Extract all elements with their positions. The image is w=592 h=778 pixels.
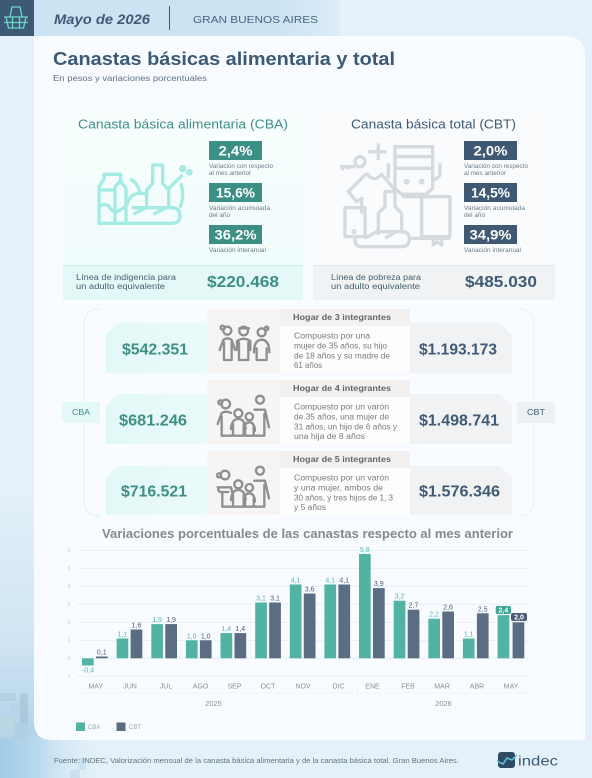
logo: indec (497, 752, 558, 768)
highlighted May 2026 labels (496, 606, 527, 622)
tag: CBT: CBT (527, 408, 545, 417)
highlighted May 2026 labels: 2,4 (499, 608, 508, 614)
poverty line: $485.030 (465, 274, 537, 291)
y axis labels: 1 (68, 638, 71, 644)
stat: cumulative CBA (209, 183, 271, 219)
icon: family of 4 (218, 396, 269, 436)
stat: annual CBT (464, 225, 521, 254)
stat: monthly CBA (209, 141, 274, 177)
panel: CBT (313, 106, 555, 300)
CBT bars (96, 584, 524, 658)
household section (62, 309, 555, 516)
CBA bars (82, 554, 509, 666)
stat: monthly CBA: Variación con respecto (209, 164, 274, 170)
value CBT 4: $1.498.741 (419, 412, 499, 430)
CBA value labels: 1,1 (118, 632, 127, 638)
stat: cumulative CBA: del año (209, 213, 231, 219)
stat: cumulative CBA: 15,6% (216, 184, 256, 200)
description household 5: y 5 años (294, 503, 326, 512)
stat: cumulative CBT: 14,5% (471, 184, 511, 200)
description household 3: de 18 años y su madre de (294, 352, 391, 360)
CBT value labels: 3,1 (270, 596, 280, 602)
description household 4: 31 años, un hijo de 6 años y (294, 422, 397, 432)
value CBT 5: $1.576.346 (419, 484, 500, 500)
description household 3 (294, 332, 391, 370)
heading CBT: Canasta básica total (CBT) (351, 116, 516, 132)
description household 3: mujer de 35 años, su hijo (294, 342, 388, 350)
month labels: SEP (227, 684, 242, 690)
heading household 3: Hogar de 3 integrantes (293, 313, 392, 322)
CBA value labels: 1,9 (152, 617, 162, 624)
description household 4: de 35 años, una mujer de (294, 412, 390, 422)
description household 3: Compuesto por una (294, 332, 371, 340)
year labels: 2025 (205, 699, 222, 708)
icon: goods (340, 143, 450, 247)
legend: CBT (129, 725, 141, 731)
y axis labels: 1 (68, 674, 71, 680)
logo: indec: indec (518, 752, 558, 768)
month labels: AGO (193, 684, 209, 690)
month labels: FEB (401, 684, 415, 690)
CBA value labels: -0,4 (82, 668, 94, 674)
CBA value labels: 5,8 (360, 547, 370, 554)
y axis labels: 6 (68, 548, 71, 554)
stat: annual CBT: 34,9% (470, 226, 512, 242)
indigence line: un adulto equivalente (76, 282, 166, 291)
stat: monthly CBT (464, 141, 529, 177)
CBT value labels (97, 578, 488, 656)
description household 5 (294, 474, 394, 512)
header band (0, 0, 340, 36)
CBA value labels: 4,1 (291, 578, 301, 584)
stat: annual CBA: Variación interanual (209, 248, 266, 254)
description household 5: y una mujer, ambos de (294, 484, 384, 492)
CBA value labels: 1,4 (221, 626, 231, 633)
CBA value labels: 2,2 (429, 612, 439, 619)
description household 4: Compuesto por un varón (294, 402, 389, 412)
value CBA 4: $681.246 (119, 412, 187, 430)
tag: CBA (62, 402, 100, 423)
CBA value labels: 1,0 (187, 633, 197, 640)
y axis labels: 5 (68, 566, 71, 572)
stat: annual CBA (209, 225, 266, 254)
icon: food (99, 165, 191, 223)
stat: monthly CBT: 2,0% (474, 142, 508, 158)
y axis labels (68, 548, 71, 680)
poverty line (331, 273, 537, 291)
source note: Fuente: INDEC, Valorización mensual de la canasta básica alimentaria y de la canasta básica total. Gran Buenos Aires. (54, 758, 459, 765)
subtitle: En pesos y variaciones porcentuales (53, 74, 207, 83)
stat: cumulative CBA: Variación acumulada (209, 206, 271, 212)
CBT value labels: 3,9 (374, 581, 384, 588)
month labels: JUN (123, 684, 137, 690)
month labels: MAY (88, 684, 103, 690)
panel: CBA (63, 106, 303, 300)
CBA value labels: 3,1 (256, 596, 266, 602)
CBT value labels: 3,6 (305, 586, 315, 594)
description household 4 (294, 402, 397, 441)
legend (76, 722, 141, 731)
y axis labels: 0 (68, 656, 71, 662)
description household 3: 61 años (294, 361, 322, 370)
stat: monthly CBA: 2,4% (218, 142, 253, 158)
tag: CBA: CBA (72, 408, 91, 417)
month labels: DIC (332, 684, 345, 690)
month labels: OCT (261, 684, 276, 690)
poverty line: un adulto equivalente (331, 282, 421, 291)
household of 4 (106, 380, 512, 444)
month labels: JUL (160, 684, 172, 690)
value CBA 5: $716.521 (121, 484, 187, 500)
date: Mayo de 2026 (54, 11, 150, 27)
description household 5: 30 años, y tres hijos de 1, 3 (294, 494, 394, 502)
y axis labels: 2 (68, 620, 71, 626)
value CBA 3: $542.351 (122, 342, 188, 358)
heading CBA: Canasta básica alimentaria (CBA) (78, 116, 288, 132)
stat: annual CBT: Variación interanual (464, 248, 521, 254)
chart title: Variaciones porcentuales de las canastas respecto al mes anterior (102, 526, 513, 541)
stat: cumulative CBT: del año (464, 213, 486, 219)
year labels: 2026 (435, 699, 452, 708)
stat: monthly CBT: al mes anterior (464, 171, 506, 177)
poverty line: Línea de pobreza para (331, 273, 422, 282)
month labels: ABR (470, 684, 484, 690)
CBA value labels (82, 547, 474, 674)
heading household 4: Hogar de 4 integrantes (293, 384, 392, 393)
CBA value labels: 4,1 (325, 578, 335, 584)
CBT value labels: 1,0 (201, 633, 211, 640)
description household 4: una hija de 8 años (294, 432, 365, 441)
CBT value labels: 2,7 (409, 603, 418, 610)
indigence line (76, 273, 279, 291)
month labels: NOV (295, 684, 311, 690)
value CBT 3: $1.193.173 (419, 342, 497, 358)
stat: cumulative CBT: Variación acumulada (464, 206, 526, 212)
title: Canastas básicas alimentaria y total (53, 49, 395, 69)
indigence line: Línea de indigencia para (76, 273, 177, 282)
CBT value labels: 2,5 (478, 606, 488, 613)
CBT value labels: 2,6 (443, 604, 453, 612)
month labels (88, 684, 519, 690)
heading household 5: Hogar de 5 integrantes (293, 455, 392, 464)
indigence line: $220.468 (207, 274, 279, 291)
CBA value labels: 3,2 (395, 594, 404, 601)
stat: cumulative CBT (464, 183, 526, 219)
y axis labels: 4 (68, 584, 71, 590)
CBT value labels: 4,1 (339, 578, 349, 584)
y axis labels: 3 (68, 602, 71, 608)
CBT value labels: 0,1 (97, 650, 107, 656)
month labels: MAY (504, 684, 519, 690)
icon: shopping basket (0, 0, 34, 36)
CBT value labels: 1,4 (235, 626, 245, 633)
year labels (205, 699, 452, 708)
CBT value labels: 1,6 (132, 622, 141, 630)
CBA value labels: 1,1 (464, 632, 474, 638)
highlighted May 2026 labels: 2,0 (514, 614, 524, 622)
household of 3 (106, 309, 512, 373)
stat: monthly CBT: Variación con respecto (464, 164, 529, 170)
stat: annual CBA: 36,2% (214, 226, 257, 242)
month labels: MAR (434, 684, 450, 690)
legend: CBA (88, 725, 100, 731)
bar chart (68, 547, 528, 708)
icon: family of 5 (217, 467, 269, 507)
icon: family of 3 (220, 326, 269, 360)
month labels: ENE (365, 684, 380, 690)
household of 5 (106, 451, 512, 515)
description household 5: Compuesto por un varón (294, 474, 389, 482)
region: GRAN BUENOS AIRES (193, 14, 318, 26)
tag: CBT (517, 402, 555, 423)
CBT value labels: 1,9 (166, 617, 176, 624)
stat: monthly CBA: al mes anterior (209, 171, 251, 177)
